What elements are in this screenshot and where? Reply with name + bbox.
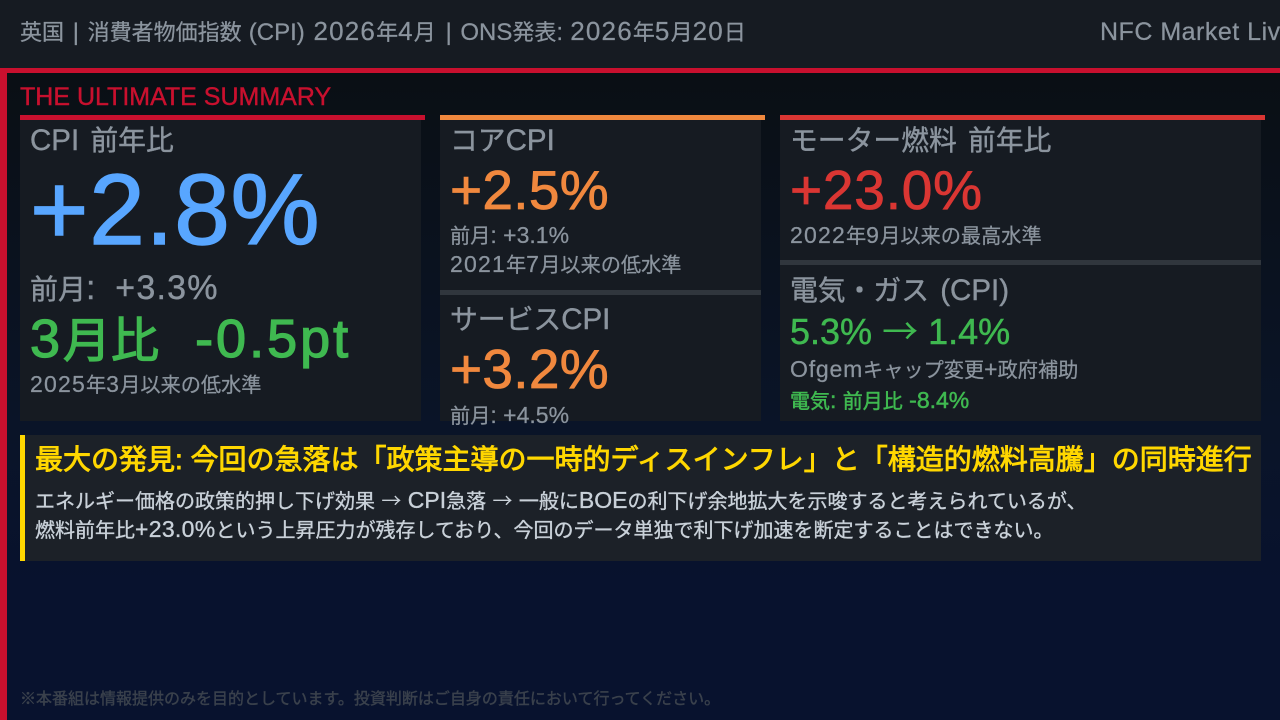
callout heading: 最大の発見: 今回の急落は「政策主導の一時的ディスインフレ」と「構造的燃料高騰」の同時進行 [35,444,1252,475]
change: 3月比 -0.5pt [30,309,351,369]
value: +2.5% [450,159,609,221]
callout line 2: 燃料前年比+23.0%という上昇圧力が残存しており、今回のデータ単独で利下げ加速を断定することはできない。 [35,516,1053,542]
divider [440,290,761,295]
energy card [780,265,1261,421]
section heading: THE ULTIMATE SUMMARY [20,82,331,110]
note: 2025年3月以来の低水準 [30,371,262,397]
disclaimer: ※本番組は情報提供のみを目的としています。投資判断はご自身の責任において行ってください。 [20,691,720,708]
divider [780,260,1261,265]
previous month: 前月: +3.1% [450,222,569,248]
note: 2022年9月以来の最高水準 [790,222,1042,248]
value: +3.2% [450,338,609,400]
label: CPI 前年比 [30,124,174,157]
previous month: 前月: +4.5% [450,402,569,428]
panel: fuel and energy [780,115,1265,421]
callout: biggest finding [20,435,1261,561]
label: コアCPI [450,124,555,157]
value: 5.3% → 1.4% [790,303,1010,355]
note: Ofgemキャップ変更+政府補助 [790,356,1078,382]
label: 電気・ガス (CPI) [790,274,1009,307]
header title: 英国 | 消費者物価指数 (CPI) 2026年4月 | ONS発表: 2026年5月20日 [20,16,746,46]
core card [440,120,761,290]
header bar [0,0,1280,73]
big number: +2.8% [30,154,320,266]
label: サービスCPI [450,303,610,336]
panel background [20,120,421,421]
previous month: 前月: +3.3% [30,269,219,307]
services card [440,295,761,421]
label: モーター燃料 前年比 [790,125,1051,156]
note: 2021年7月以来の低水準 [450,251,682,277]
fuel card [780,120,1261,260]
panel: CPI headline [20,115,425,421]
panel: core and services [440,115,765,421]
callout line 1: エネルギー価格の政策的押し下げ効果 → CPI急落 → 一般にBOEの利下げ余地拡大を示唆すると考えられているが、 [35,485,1086,514]
left accent bar [0,68,7,720]
value: +23.0% [790,159,983,221]
electricity change: 電気: 前月比 -8.4% [790,386,969,412]
